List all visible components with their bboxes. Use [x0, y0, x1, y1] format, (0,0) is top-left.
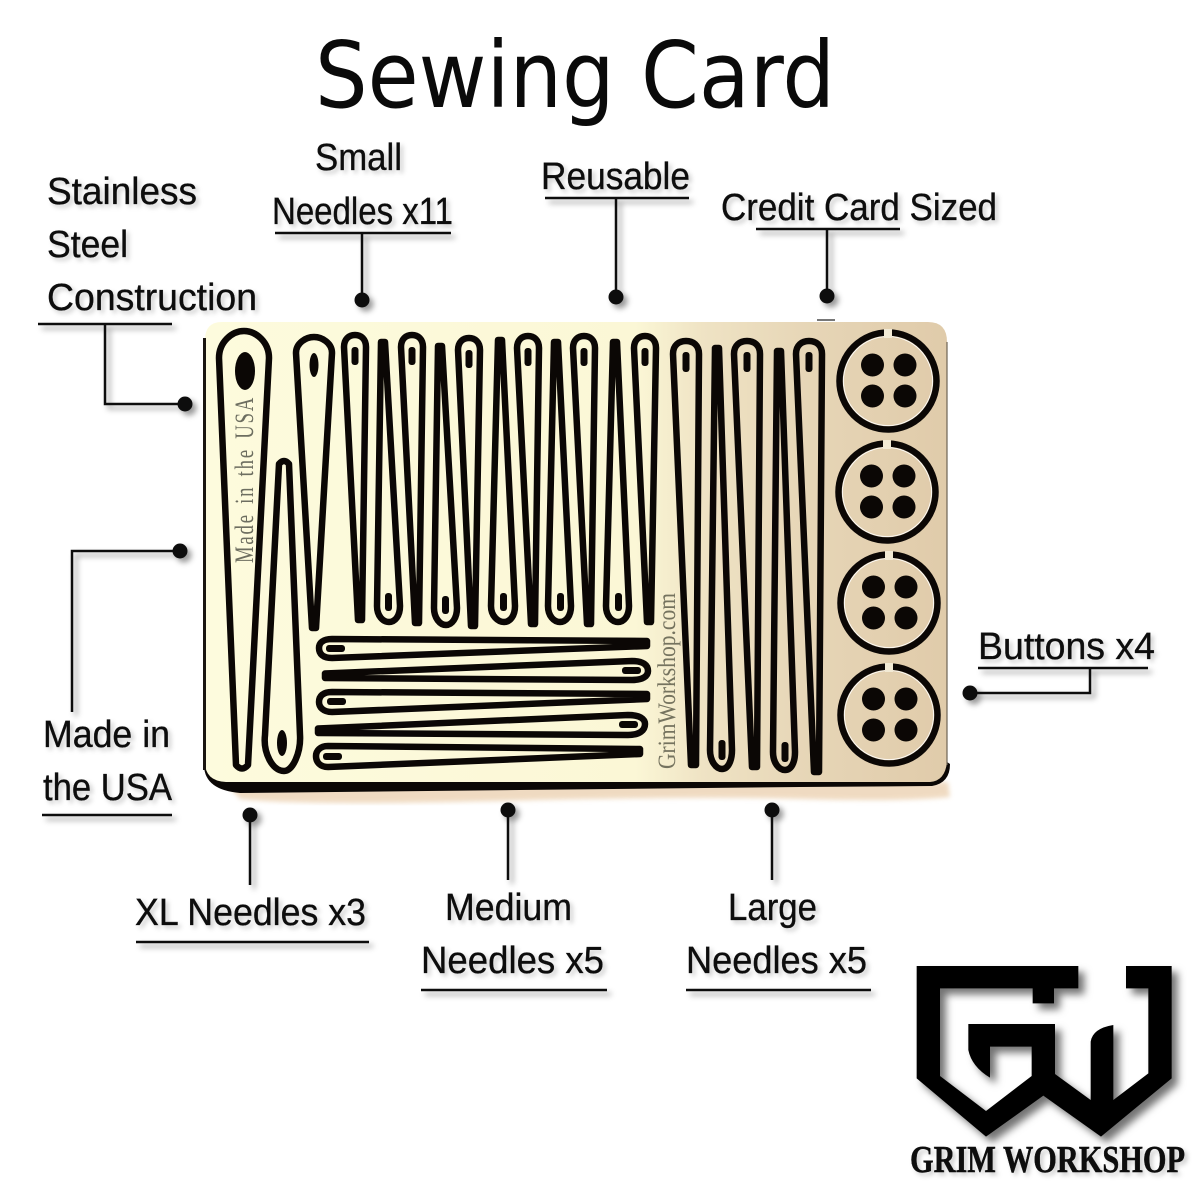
text: made in the usa: Made in the USA — [230, 396, 259, 563]
label: made in the usa: Made in — [43, 714, 170, 756]
label: xl needles: XL Needles x3 — [135, 892, 366, 934]
label: large needles: Large — [728, 887, 817, 929]
label: large needles — [686, 802, 871, 990]
icon: GW mark — [917, 966, 1172, 1137]
label: credit card sized — [721, 187, 997, 304]
label: medium needles — [421, 802, 607, 990]
label: buttons: Buttons x4 — [978, 626, 1155, 668]
small needles — [344, 335, 656, 626]
card shadow smudge — [225, 782, 950, 803]
text: grimworkshop.com: GrimWorkshop.com — [654, 593, 681, 769]
label: small needles — [272, 137, 453, 308]
label: buttons — [962, 626, 1155, 700]
label: medium needles: Medium — [445, 887, 572, 929]
label: made in the usa: the USA — [43, 767, 173, 809]
label: stainless steel construction: Steel — [47, 224, 128, 266]
label: reusable: Reusable — [541, 156, 690, 198]
label: made in the usa — [42, 544, 188, 815]
panel: sewing card — [204, 320, 950, 803]
label: credit card sized: Credit Card Sized — [721, 187, 997, 229]
label: xl needles — [135, 808, 369, 942]
XL needles — [219, 331, 332, 771]
label: large needles: Needles x5 — [686, 940, 867, 982]
label: reusable — [541, 156, 690, 304]
label: stainless steel construction: Stainless — [47, 171, 197, 213]
label: small needles: Small — [315, 137, 402, 179]
buttons — [838, 329, 938, 764]
title: Sewing Card — [315, 22, 835, 129]
label: small needles: Needles x11 — [272, 191, 453, 233]
medium needles — [316, 639, 648, 767]
label: stainless steel construction: Construction — [47, 277, 257, 319]
label: medium needles: Needles x5 — [421, 940, 604, 982]
label: stainless steel construction — [38, 171, 257, 412]
logo: grim workshop — [910, 966, 1185, 1181]
large needles — [673, 341, 822, 772]
card body — [205, 322, 947, 784]
